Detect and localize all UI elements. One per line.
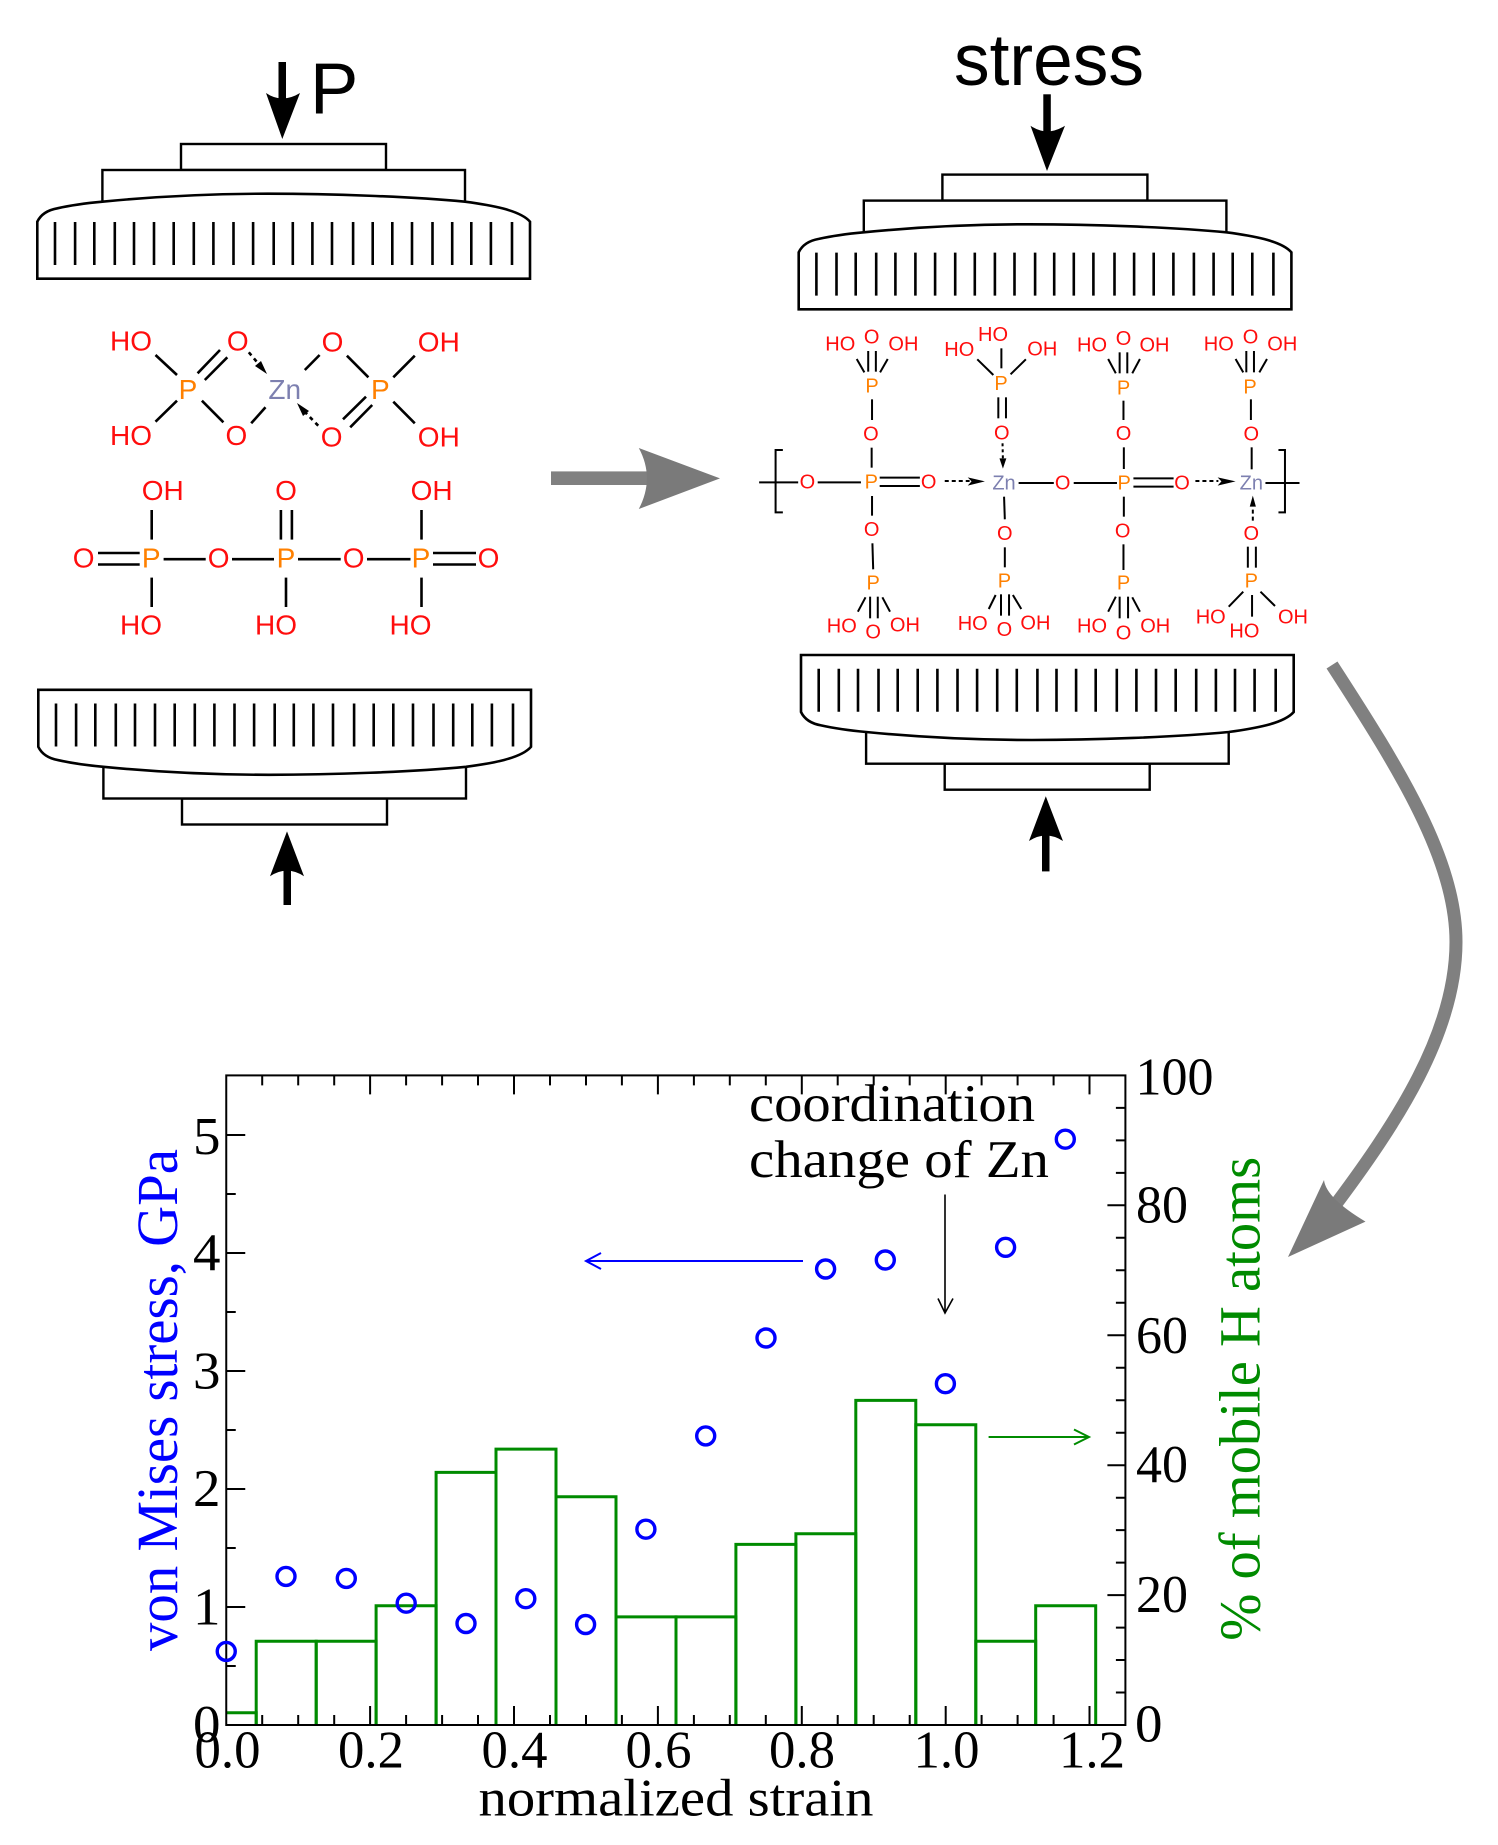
- molecule: triphosphate chain: P: [412, 542, 430, 573]
- molecule: polymerised zinc phosphate network: O: [800, 471, 815, 493]
- arrow: grey curved arrow to plot: [1288, 665, 1456, 1257]
- molecule: polymerised zinc phosphate network: O: [864, 326, 879, 348]
- molecule: triphosphate chain: OH: [142, 475, 184, 506]
- left axis tick labels: 1: [193, 1578, 220, 1636]
- molecule: triphosphate chain: P: [277, 542, 295, 573]
- molecule: polymerised zinc phosphate network: [759, 324, 1308, 644]
- icon: left upward pressure arrow: [270, 831, 304, 905]
- molecule: zinc phosphate complex: P: [179, 374, 197, 405]
- molecule: polymerised zinc phosphate network: P: [1118, 472, 1131, 494]
- molecule: polymerised zinc phosphate network: O: [1116, 622, 1131, 644]
- molecule: polymerised zinc phosphate network: HO: [1196, 606, 1226, 628]
- molecule: polymerised zinc phosphate network: HO: [825, 334, 855, 356]
- molecule: polymerised zinc phosphate network: HO: [944, 339, 974, 361]
- left axis tick labels: 2: [193, 1460, 220, 1518]
- arrow: black pointing to coordination change: [938, 1194, 953, 1313]
- molecule: polymerised zinc phosphate network: HO: [1077, 616, 1107, 638]
- panel: right upper press: [799, 175, 1291, 309]
- annotation: coordination change of Zn: coordination: [749, 1075, 1035, 1133]
- molecule: polymerised zinc phosphate network: P: [998, 570, 1011, 592]
- molecule: polymerised zinc phosphate network: OH: [1267, 334, 1297, 356]
- molecule: triphosphate chain: O: [275, 475, 297, 506]
- molecule: triphosphate chain: OH: [411, 475, 453, 506]
- molecule: polymerised zinc phosphate network: HO: [978, 324, 1008, 346]
- molecule: polymerised zinc phosphate network: P: [865, 376, 879, 398]
- molecule: polymerised zinc phosphate network: O: [1243, 326, 1258, 348]
- molecule: polymerised zinc phosphate network: OH: [1027, 338, 1057, 360]
- molecule: polymerised zinc phosphate network: OH: [1140, 615, 1170, 637]
- molecule: triphosphate chain: HO: [255, 610, 297, 641]
- molecule: triphosphate chain: HO: [120, 610, 162, 641]
- x axis tick labels: 0.2: [338, 1722, 404, 1780]
- histogram: percent of mobile H atoms: [226, 1400, 1096, 1725]
- molecule: polymerised zinc phosphate network: P: [994, 373, 1008, 395]
- plot frame and axis ticks: [226, 1075, 1125, 1725]
- molecule: zinc phosphate complex: OH: [418, 422, 460, 453]
- molecule: zinc phosphate complex: HO: [110, 326, 152, 357]
- left axis tick labels: 4: [193, 1224, 220, 1282]
- molecule: polymerised zinc phosphate network: O: [997, 619, 1012, 641]
- molecule: zinc phosphate complex: O: [226, 420, 247, 451]
- molecule: polymerised zinc phosphate network: HO: [1204, 334, 1234, 356]
- molecule: triphosphate chain: O: [478, 542, 499, 573]
- molecule: polymerised zinc phosphate network: P: [867, 572, 880, 594]
- molecule: polymerised zinc phosphate network: O: [865, 621, 881, 643]
- molecule: zinc phosphate complex: HO: [110, 420, 152, 451]
- molecule: triphosphate chain: O: [73, 542, 95, 573]
- left axis tick labels: 3: [193, 1343, 220, 1401]
- molecule: polymerised zinc phosphate network: O: [1244, 424, 1259, 446]
- arrow: green pointing to right axis: [989, 1430, 1089, 1444]
- left axis tick labels: 0: [193, 1696, 220, 1754]
- molecule: polymerised zinc phosphate network: O: [1055, 472, 1070, 494]
- molecule: polymerised zinc phosphate network: Zn: [992, 472, 1016, 494]
- molecule: triphosphate chain: P: [142, 542, 161, 573]
- molecule: polymerised zinc phosphate network: O: [997, 523, 1013, 545]
- molecule: polymerised zinc phosphate network: P: [1117, 572, 1130, 594]
- annotation: coordination change of Zn: [749, 1075, 1049, 1189]
- molecule: triphosphate chain: O: [343, 542, 364, 573]
- x axis title: normalized strain: [478, 1770, 874, 1828]
- right axis tick labels: 0: [1135, 1696, 1162, 1754]
- molecule: polymerised zinc phosphate network: Zn: [1240, 472, 1263, 494]
- molecule: polymerised zinc phosphate network: OH: [890, 615, 920, 637]
- right axis tick labels: 60: [1136, 1307, 1188, 1365]
- molecule: zinc phosphate complex: P: [371, 374, 390, 405]
- x axis tick labels: 0.0: [194, 1722, 260, 1780]
- left axis title: von Mises stress, GPa: [125, 1149, 190, 1651]
- x axis tick labels: 1.2: [1059, 1722, 1125, 1780]
- molecule: zinc phosphate complex: Zn: [268, 374, 301, 405]
- molecule: zinc phosphate complex: [110, 326, 460, 453]
- molecule: polymerised zinc phosphate network: OH: [888, 334, 918, 356]
- molecule: polymerised zinc phosphate network: P: [1117, 377, 1130, 399]
- molecule: triphosphate chain: HO: [390, 610, 432, 641]
- x axis tick labels: 1.0: [914, 1722, 980, 1780]
- molecule: polymerised zinc phosphate network: HO: [1077, 335, 1107, 357]
- right axis title: % of mobile H atoms: [1208, 1157, 1273, 1641]
- molecule: zinc phosphate complex: O: [322, 327, 343, 358]
- left axis tick labels: 5: [193, 1108, 220, 1166]
- panel: left lower press: [38, 690, 531, 824]
- molecule: polymerised zinc phosphate network: O: [864, 519, 879, 541]
- data series: von Mises stress circles: [217, 1130, 1074, 1660]
- arrow: blue pointing to left axis: [586, 1253, 803, 1269]
- molecule: polymerised zinc phosphate network: O: [1116, 328, 1131, 350]
- right axis tick labels: [1135, 1049, 1214, 1754]
- molecule: polymerised zinc phosphate network: HO: [827, 616, 857, 638]
- label: stress: stress: [954, 20, 1144, 101]
- x axis tick labels: 0.8: [769, 1722, 835, 1780]
- label: P: P: [310, 48, 358, 129]
- molecule: polymerised zinc phosphate network: O: [1174, 472, 1190, 494]
- chart: von Mises stress and mobile H atoms versus normalized strain: [125, 1049, 1273, 1828]
- panel: left upper press: [37, 144, 530, 279]
- molecule: polymerised zinc phosphate network: O: [994, 422, 1010, 444]
- icon: right downward stress arrow: [1030, 94, 1065, 171]
- molecule: zinc phosphate complex: O: [227, 326, 249, 357]
- icon: left downward pressure arrow: [266, 62, 300, 139]
- molecule: polymerised zinc phosphate network: HO: [1229, 621, 1259, 643]
- panel: right lower press: [801, 655, 1294, 790]
- molecule: polymerised zinc phosphate network: OH: [1020, 612, 1050, 634]
- x axis tick labels: 0.4: [482, 1722, 548, 1780]
- molecule: polymerised zinc phosphate network: O: [1115, 520, 1130, 542]
- arrow: grey horizontal process arrow: [551, 448, 720, 509]
- left axis tick labels: [193, 1108, 220, 1754]
- annotation: coordination change of Zn: change of Zn: [749, 1131, 1049, 1189]
- icon: right upward stress arrow: [1029, 796, 1063, 871]
- molecule: triphosphate chain: [73, 475, 499, 641]
- molecule: polymerised zinc phosphate network: O: [1116, 423, 1131, 445]
- molecule: polymerised zinc phosphate network: OH: [1140, 335, 1170, 357]
- x axis tick labels: 0.6: [626, 1722, 692, 1780]
- molecule: polymerised zinc phosphate network: P: [865, 471, 878, 493]
- right axis tick labels: 40: [1136, 1436, 1188, 1494]
- molecule: polymerised zinc phosphate network: OH: [1278, 606, 1308, 628]
- molecule: triphosphate chain: O: [208, 542, 230, 573]
- molecule: polymerised zinc phosphate network: P: [1243, 376, 1257, 398]
- molecule: polymerised zinc phosphate network: O: [1244, 523, 1259, 545]
- molecule: polymerised zinc phosphate network: HO: [958, 613, 988, 635]
- right axis tick labels: 20: [1136, 1566, 1188, 1624]
- right axis tick labels: 100: [1136, 1049, 1214, 1107]
- molecule: polymerised zinc phosphate network: O: [921, 471, 936, 493]
- right axis tick labels: 80: [1136, 1176, 1188, 1234]
- molecule: polymerised zinc phosphate network: O: [863, 424, 879, 446]
- molecule: polymerised zinc phosphate network: P: [1245, 570, 1258, 592]
- molecule: zinc phosphate complex: O: [321, 422, 342, 453]
- x axis tick labels: [194, 1722, 1125, 1780]
- molecule: zinc phosphate complex: OH: [418, 327, 460, 358]
